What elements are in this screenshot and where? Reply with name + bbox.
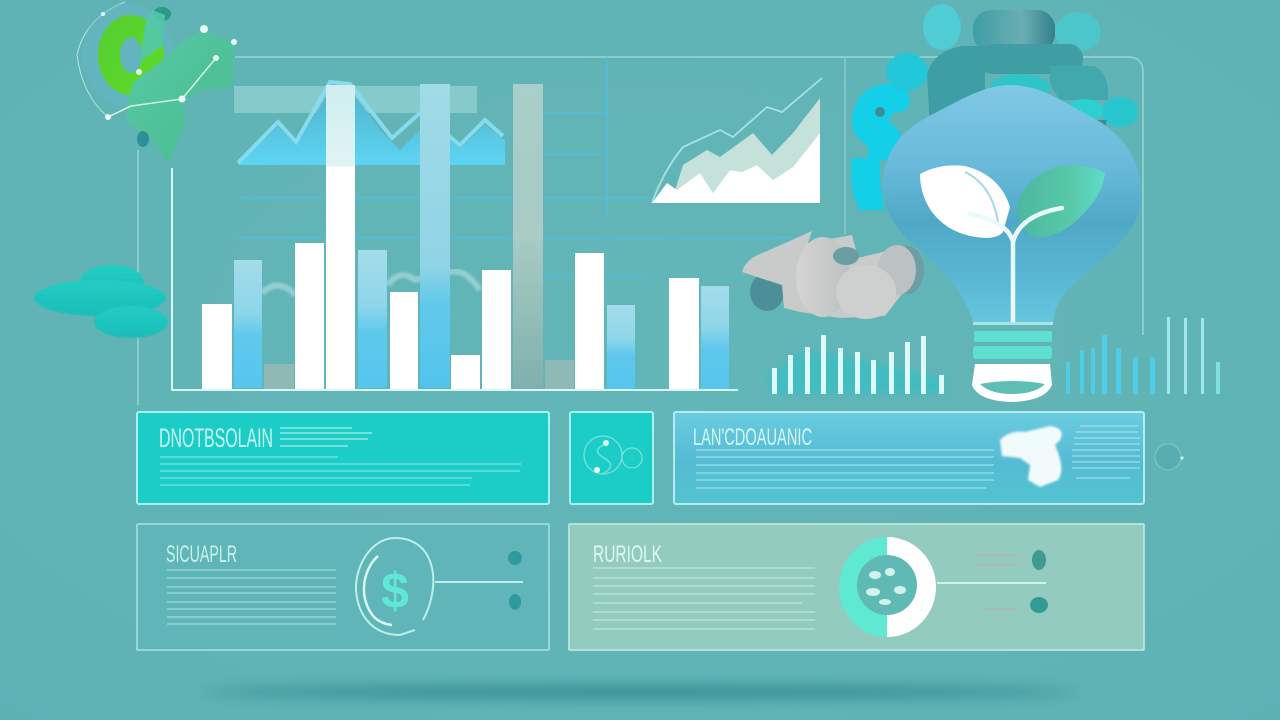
heading: LAN'CDOAUANIC (693, 424, 812, 451)
donut chart (839, 537, 936, 637)
heading: SICUAPLR (166, 541, 237, 568)
icon: dollar ring (356, 538, 433, 635)
map blob (1000, 426, 1062, 487)
rising area chart (652, 78, 822, 203)
chart axes (172, 168, 738, 390)
heading: DNOTBSOLAIN (159, 423, 273, 453)
wave behind bars (262, 271, 480, 295)
ground shadow (200, 686, 1080, 698)
icon: brain cloud behind bulb (851, 4, 1138, 210)
small bar chart right (1066, 317, 1220, 394)
icon: globe with constellation (77, 2, 237, 163)
icon: light bulb with sprout (883, 85, 1141, 402)
icon: grey rock cloud (742, 231, 924, 319)
icon: teal cloud (34, 265, 168, 338)
bulb base (972, 322, 1053, 402)
sprout stem (970, 208, 1062, 322)
panel: top right blue text (674, 412, 1144, 504)
icon: dollar ring: $ (381, 563, 409, 619)
small bar chart left (768, 335, 945, 394)
panel: top left teal text (137, 412, 549, 504)
panel: small teal icon (570, 412, 653, 504)
leaf: green (1017, 166, 1105, 237)
icon: small orbit circle (1155, 444, 1184, 470)
dashboard frame (138, 57, 1143, 405)
leaf: white (920, 165, 1010, 238)
panel: bottom left finance (137, 524, 549, 650)
panel: bottom right donut (569, 524, 1144, 650)
bar chart (202, 84, 729, 390)
area chart: blue mountains (234, 82, 505, 165)
grid lines (237, 57, 840, 277)
heading: RURIOLK (593, 541, 662, 568)
